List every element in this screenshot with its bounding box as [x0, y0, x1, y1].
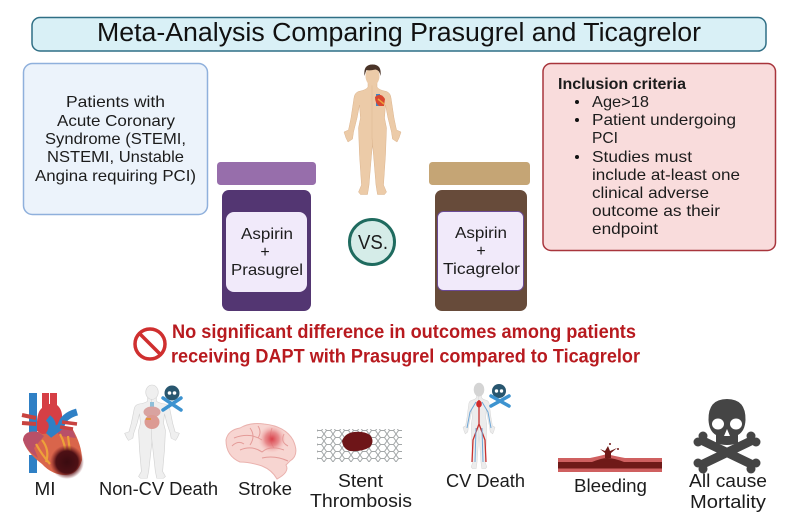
pill bottle: aspirin + prasugrel — [217, 162, 316, 311]
pill bottle: aspirin + prasugrel: + — [260, 244, 270, 261]
icon: prohibition sign — [135, 329, 165, 359]
panel: patients: Patients with — [66, 94, 165, 111]
vs badge — [350, 220, 394, 264]
label: MI: MI — [34, 478, 56, 499]
title — [32, 18, 766, 51]
outcome: all cause mortality skull — [694, 399, 760, 474]
conclusion callout: receiving DAPT with Prasugrel compared to Ticagrelor — [171, 346, 641, 368]
label: Stent Thrombosis: Stent — [338, 470, 383, 491]
panel: patients — [24, 64, 208, 214]
label: Stent Thrombosis — [310, 470, 412, 511]
outcome: stroke brain — [226, 424, 296, 479]
outcome: bleeding vessel — [558, 443, 662, 472]
label: Stroke: Stroke — [238, 478, 292, 499]
conclusion callout: No significant difference in outcomes among patients — [172, 322, 636, 343]
panel: inclusion criteria — [543, 64, 776, 250]
pill bottle: aspirin + prasugrel: Aspirin — [241, 226, 293, 243]
panel: inclusion criteria: Age>18 — [592, 94, 649, 111]
pill bottle: aspirin + ticagrelor: + — [476, 243, 486, 260]
conclusion callout — [171, 322, 641, 368]
outcome: stent thrombosis — [317, 429, 402, 462]
panel: patients: Angina requiring PCI) — [35, 168, 196, 185]
icon: patient body with heart — [344, 64, 401, 194]
panel: inclusion criteria: Studies must — [592, 149, 693, 166]
panel: inclusion criteria: include at-least one — [592, 167, 740, 184]
label: Stent Thrombosis: Thrombosis — [310, 490, 412, 511]
panel: patients: NSTEMI, Unstable — [47, 149, 184, 166]
panel: inclusion criteria: clinical adverse — [592, 185, 709, 202]
pill bottle: aspirin + ticagrelor: Ticagrelor — [443, 261, 521, 278]
panel: inclusion criteria: outcome as their — [592, 203, 721, 220]
vs badge: VS. — [358, 232, 388, 254]
label: All cause Mortality: Mortality — [690, 491, 767, 512]
label: All cause Mortality: All cause — [689, 470, 767, 491]
panel: inclusion criteria: Inclusion criteria — [558, 76, 686, 93]
pill bottle: aspirin + ticagrelor: Aspirin — [455, 225, 507, 242]
panel: inclusion criteria: endpoint — [592, 221, 659, 238]
panel: patients: Acute Coronary — [57, 113, 175, 130]
label: Bleeding: Bleeding — [574, 475, 647, 496]
outcome: MI heart — [22, 393, 84, 479]
panel: inclusion criteria: Patient undergoing — [592, 112, 736, 129]
label: All cause Mortality — [689, 470, 767, 512]
outcome: CV death figure — [463, 383, 509, 468]
label: Non-CV Death: Non-CV Death — [99, 478, 218, 499]
title: Meta-Analysis Comparing Prasugrel and Ticagrelor — [97, 19, 702, 47]
pill bottle: aspirin + prasugrel: Prasugrel — [231, 262, 303, 279]
panel: inclusion criteria: PCI — [592, 130, 618, 147]
label: CV Death: CV Death — [446, 470, 525, 491]
pill bottle: aspirin + ticagrelor — [429, 162, 530, 311]
outcome: non-CV death figure — [125, 385, 181, 478]
panel: patients: Syndrome (STEMI, — [45, 131, 186, 148]
